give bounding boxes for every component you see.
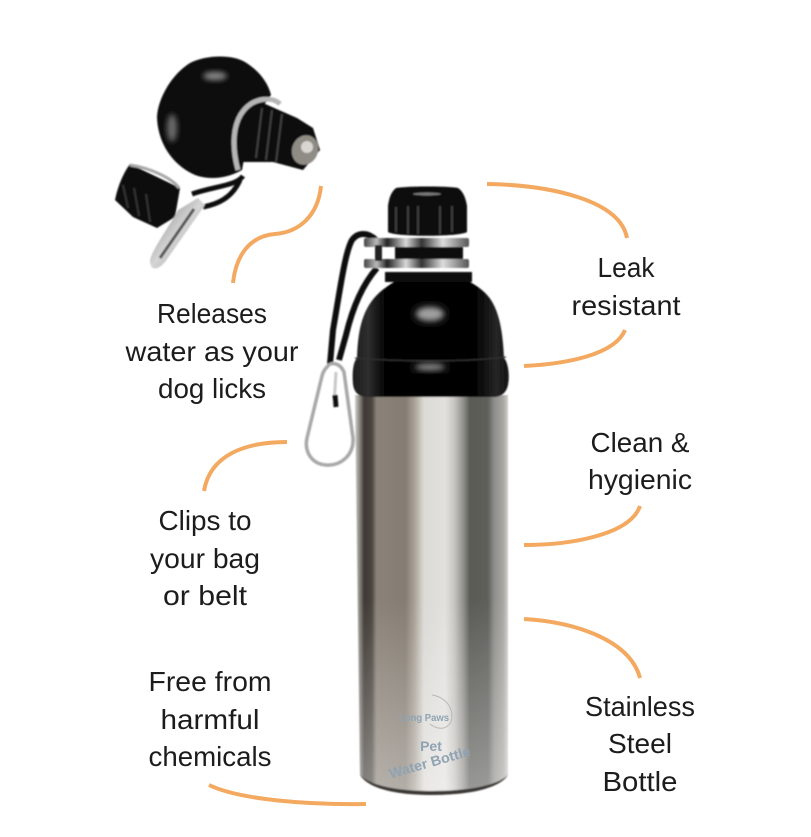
label: leak resistant: resistant — [572, 290, 681, 321]
bottle body — [355, 395, 508, 795]
label: releases water — [124, 298, 298, 404]
bottle logo text: Pet — [420, 738, 442, 754]
label: free from harmful chemicals: chemicals — [148, 741, 272, 772]
bottle logo text — [387, 695, 472, 781]
curve: clean and hygienic — [524, 506, 640, 545]
label: clean and hygienic: Clean & — [590, 427, 690, 458]
label: clips to bag: your bag — [150, 543, 260, 574]
dome lid — [157, 56, 271, 178]
bottle logo text: Water Bottle — [387, 743, 472, 781]
label: clean and hygienic: hygienic — [588, 464, 692, 495]
label: clips to bag — [150, 505, 260, 611]
carabiner clip and cord — [306, 234, 377, 465]
label: stainless steel bottle: Stainless — [585, 691, 695, 722]
curve: leak resistant lower — [524, 330, 625, 366]
label: stainless steel bottle — [585, 691, 695, 797]
label: releases water: Releases — [157, 298, 267, 329]
label: free from harmful chemicals — [148, 666, 272, 772]
cord — [192, 176, 243, 207]
label: leak resistant: Leak — [598, 252, 655, 283]
bottle logo text: Long Paws — [399, 713, 449, 724]
label: stainless steel bottle: Steel — [608, 728, 672, 759]
label: releases water: dog licks — [158, 373, 266, 404]
curve: free from chemicals — [209, 785, 366, 804]
label: free from harmful chemicals: Free from — [148, 666, 272, 697]
black shoulder and collar — [353, 272, 509, 397]
small cap — [115, 164, 180, 228]
curve: stainless steel — [524, 619, 640, 678]
curve: lid callout — [233, 186, 321, 283]
small clip — [150, 198, 205, 268]
spout — [236, 103, 320, 170]
neck rings — [364, 238, 469, 268]
label: clips to bag: Clips to — [158, 505, 252, 536]
label: releases water: water as your — [124, 336, 298, 367]
curve: leak resistant upper — [487, 184, 627, 238]
label: clips to bag: or belt — [163, 580, 247, 611]
label: free from harmful chemicals: harmful — [160, 704, 260, 735]
label: stainless steel bottle: Bottle — [602, 766, 678, 797]
curve: clips to bag — [204, 442, 287, 491]
label: leak resistant — [572, 252, 681, 321]
product photo: stainless steel bottle — [306, 186, 509, 795]
screw cap — [388, 186, 467, 236]
label: clean and hygienic — [588, 427, 692, 495]
product photo: open lid with spout — [115, 56, 322, 268]
silver ring — [234, 99, 280, 170]
